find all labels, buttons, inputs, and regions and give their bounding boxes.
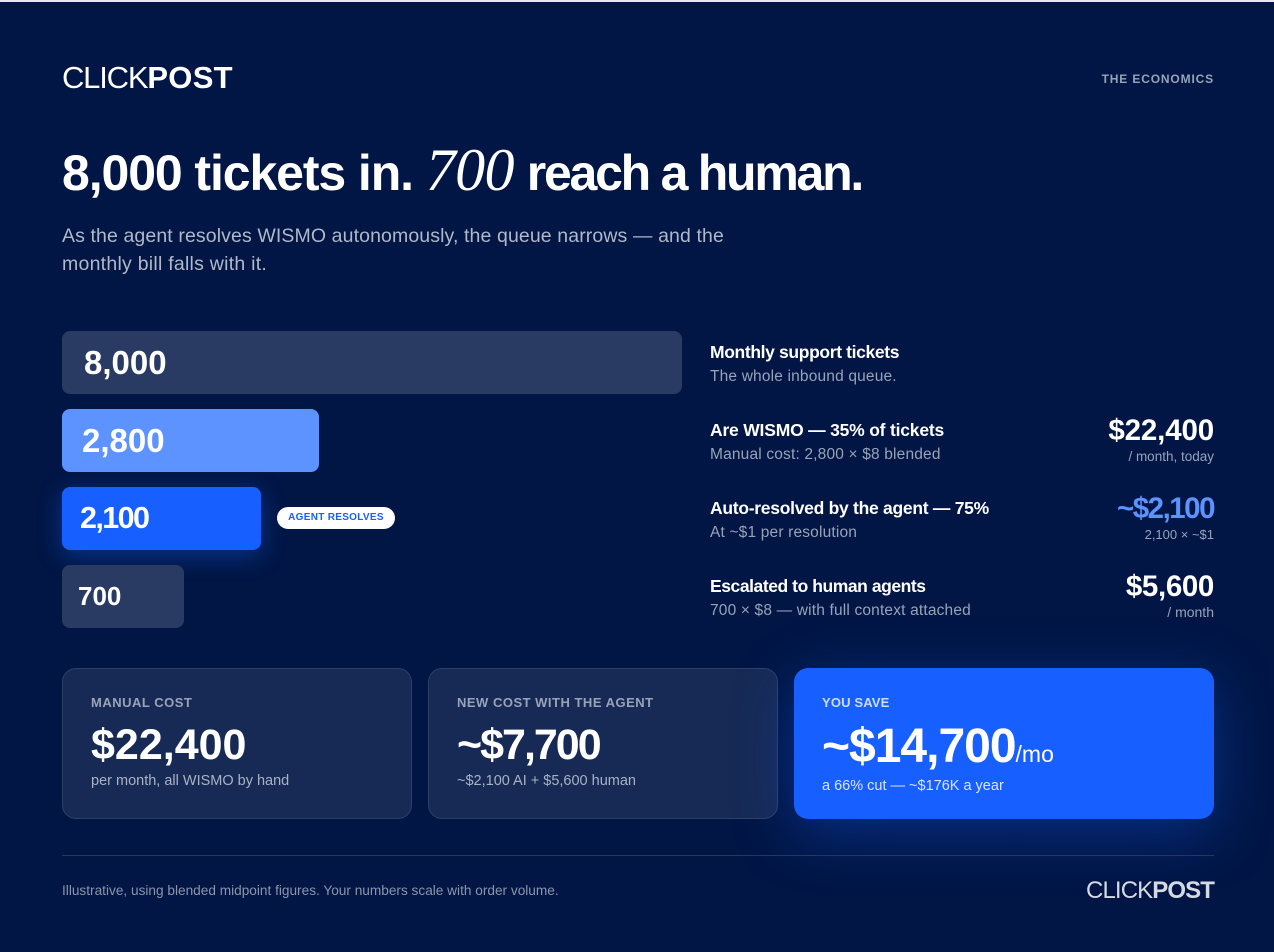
card value: $22,400 xyxy=(91,721,246,769)
card: manual cost xyxy=(62,668,412,819)
row: auto-resolved xyxy=(710,498,989,541)
card note: per month, all WISMO by hand xyxy=(91,773,289,789)
row: monthly support tickets xyxy=(710,342,899,385)
card value: ~$14,700/mo xyxy=(822,720,1054,773)
row title: Escalated to human agents xyxy=(710,576,926,596)
amount: 22,400: $22,400 xyxy=(1108,414,1214,447)
row sub: Manual cost: 2,800 × $8 blended xyxy=(710,446,941,463)
bar: 700 escalated xyxy=(62,565,184,628)
footnote: Illustrative, using blended midpoint figures. Your numbers scale with order volume. xyxy=(62,883,559,898)
bar: 2,100 agent resolves: 2,100 xyxy=(80,501,148,535)
subtitle: monthly bill falls with it. xyxy=(62,253,267,275)
bar: 2,800 WISMO: 2,800 xyxy=(82,422,165,459)
logo: ClickPost footer: CLICKPOST xyxy=(1086,877,1214,904)
card label: YOU SAVE xyxy=(822,695,889,710)
card: new cost xyxy=(428,668,778,819)
funnel bars xyxy=(48,331,682,628)
amount note: / month xyxy=(1167,604,1214,620)
bar: 2,800 WISMO xyxy=(62,409,319,472)
row title: Auto-resolved by the agent — 75% xyxy=(710,498,989,518)
row: WISMO xyxy=(710,420,944,463)
card label: NEW COST WITH THE AGENT xyxy=(457,695,654,710)
bar: 8,000 tickets: 8,000 xyxy=(84,344,167,381)
amount: 2,100: ~$2,100 xyxy=(1117,492,1214,525)
bar: 700 escalated: 700 xyxy=(78,581,121,611)
subtitle: As the agent resolves WISMO autonomously, the queue narrows — and the xyxy=(62,225,724,247)
row title: Are WISMO — 35% of tickets xyxy=(710,420,944,440)
section label: THE ECONOMICS xyxy=(1102,72,1214,86)
badge: agent resolves: AGENT RESOLVES xyxy=(288,512,384,523)
amount: 5,600: $5,600 xyxy=(1126,570,1214,603)
row: escalated xyxy=(710,576,971,619)
card label: MANUAL COST xyxy=(91,695,192,710)
bar: 2,100 agent resolves xyxy=(62,487,261,550)
logo: ClickPost header: CLICKPOST xyxy=(62,60,233,95)
amount note: 2,100 × ~$1 xyxy=(1145,527,1214,542)
row sub: At ~$1 per resolution xyxy=(710,524,857,541)
subtitle xyxy=(62,225,724,275)
card note: ~$2,100 AI + $5,600 human xyxy=(457,773,636,789)
card value: ~$7,700 xyxy=(457,721,600,769)
row sub: 700 × $8 — with full context attached xyxy=(710,602,971,619)
badge: agent resolves xyxy=(277,507,395,529)
card: you save xyxy=(794,668,1214,819)
card note: a 66% cut — ~$176K a year xyxy=(822,778,1004,794)
amount note: / month, today xyxy=(1128,449,1214,464)
row sub: The whole inbound queue. xyxy=(710,368,897,385)
row title: Monthly support tickets xyxy=(710,342,899,362)
title: 8,000 tickets in. 700 reach a human. xyxy=(62,137,862,203)
bar: 8,000 tickets xyxy=(62,331,682,394)
